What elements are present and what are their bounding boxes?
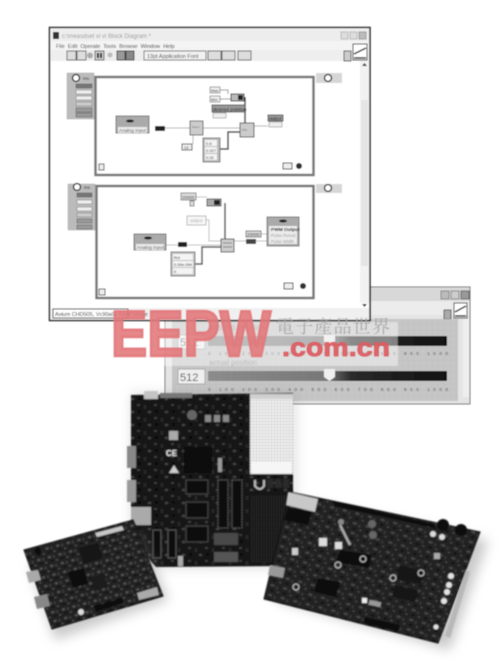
constants (182, 144, 192, 150)
block: PWM Output: Pulse Period (271, 233, 296, 238)
numeric: actual value (178, 369, 205, 384)
scale: actual position: 0 100 200 300 400 500 600 700 800 900 1000 (208, 387, 448, 392)
ethernet jack (286, 492, 318, 512)
gains cluster: 0.8 (206, 141, 212, 146)
light components (169, 410, 229, 566)
timed loop output node (316, 184, 342, 193)
timed loop input node: ms (84, 185, 91, 190)
barrel jack (34, 548, 42, 554)
board: right large board (264, 492, 480, 643)
block: PWM Output: Pulse Width (271, 239, 295, 244)
icon: LabVIEW logo (444, 303, 467, 319)
timed loop input node (67, 73, 94, 119)
output terminal (268, 115, 283, 127)
stop terminal (284, 283, 306, 289)
numeric: actual value: 512 (180, 372, 198, 384)
title bar (51, 29, 369, 41)
block: scale function (190, 121, 203, 135)
panel: front panel window (165, 287, 470, 404)
connector pins right edge (434, 573, 454, 630)
board: left small board (24, 520, 163, 629)
numeric: desired value (178, 335, 205, 349)
panel: lower timed loop (68, 184, 342, 298)
PID block (221, 239, 234, 252)
right edge metal (445, 570, 470, 638)
USB port (26, 570, 41, 583)
ethernet jack (131, 507, 151, 525)
light components (292, 519, 440, 559)
bundle node (231, 94, 244, 101)
scrollbar (360, 61, 369, 307)
audio jacks (284, 507, 312, 525)
period constants: 20000 (247, 232, 260, 237)
USB connector (268, 565, 285, 578)
block: Analog Input: Analog Input (137, 245, 165, 251)
test points (293, 556, 424, 590)
label: actual position: actual position (209, 358, 257, 367)
terminal block (137, 587, 159, 600)
timed loop frame (96, 77, 314, 175)
wires upper (165, 126, 268, 144)
bundle node (207, 199, 221, 206)
timed loop input node: ms (83, 76, 90, 81)
recycling mark (169, 465, 179, 473)
output terminal: output (269, 116, 282, 121)
block: Analog Input (134, 234, 166, 251)
watermark: domain: .com.cn (282, 332, 390, 362)
output terminal grey: output (190, 218, 203, 223)
desired position terminal (212, 105, 247, 118)
white square pad (362, 598, 381, 607)
breadboard (250, 394, 293, 474)
shadow: left board (30, 530, 168, 640)
label: desired position: desired position (209, 323, 265, 332)
chips (153, 447, 242, 562)
top connector (144, 391, 158, 399)
block: scale function: Mean (192, 125, 200, 129)
gains cluster: 0.027 (206, 148, 217, 153)
serial connectors (127, 446, 136, 502)
header connector (95, 526, 124, 537)
slider: actual position (208, 369, 447, 381)
chips (314, 550, 425, 631)
PID block: PID (242, 128, 248, 132)
shadow: right board (275, 500, 488, 650)
perf board (250, 495, 291, 563)
buttons row (255, 479, 289, 489)
gains cluster: 0.02 (206, 155, 215, 160)
top edge strip (334, 502, 435, 528)
block: PWM Output (267, 217, 300, 246)
constant 20000 (181, 193, 196, 206)
stop terminal (283, 163, 302, 169)
panel: upper timed loop (67, 73, 342, 175)
constant 20000: 20000 (182, 195, 195, 200)
Max Min constants: Min (211, 97, 217, 102)
watermark: EEPW logo (111, 297, 390, 370)
constants: 10 (184, 145, 189, 150)
status bar (51, 308, 369, 319)
timed loop input node (68, 184, 95, 230)
conversion node (178, 242, 187, 247)
shadows under boards (131, 393, 296, 568)
gains cluster: 0.00e-004 (174, 262, 193, 267)
iteration terminal (99, 164, 104, 170)
PID block (240, 123, 254, 137)
title bar: c:\measdset vi vi Block Diagram * (62, 34, 152, 40)
board: central development board (127, 391, 293, 567)
gains cluster (203, 138, 220, 162)
pin header (94, 598, 124, 612)
timed loop frame (96, 186, 314, 298)
toolbar (51, 44, 369, 61)
Max Min constants (210, 87, 220, 102)
scale: desired position: 0 100 200 300 400 500 600 700 800 900 1000 (208, 351, 448, 356)
chips (68, 543, 108, 591)
menu bar: File Edit Operate Tools Browse Window Help (56, 44, 175, 50)
serial port (34, 594, 50, 609)
iteration terminal (99, 289, 105, 295)
window buttons (441, 291, 469, 299)
gains cluster: 0 (174, 269, 177, 274)
period constants (246, 231, 261, 244)
numeric: desired value: 512 (180, 337, 198, 349)
block: PWM Output: PWM Output (271, 227, 300, 233)
output terminal grey (187, 216, 206, 225)
button (78, 609, 84, 615)
gains cluster (171, 252, 195, 276)
timed loop output node (316, 73, 342, 83)
menu bar (51, 41, 369, 50)
Max Min constants: Max (211, 88, 219, 93)
wires lower (165, 197, 267, 245)
slider: desired position (208, 335, 447, 348)
status bar: Avium CHD505, Vc90a0c RAM Image (55, 312, 148, 318)
conversion node (155, 126, 165, 131)
desired position terminal: desired position (213, 107, 247, 113)
watermark: Chinese site name: 電子產品世界 (276, 313, 390, 339)
toolbar: 13pt Application Font (147, 54, 199, 60)
watermark: EEPW logo: EEPW (111, 297, 272, 370)
block: Analog Input: Analog Input (119, 128, 147, 134)
block: Analog Input (116, 116, 149, 134)
CE mark: CE (166, 449, 178, 458)
watermark: translucent band (112, 322, 398, 366)
panel: block diagram window (50, 28, 370, 320)
gains cluster: Rct (174, 255, 181, 260)
